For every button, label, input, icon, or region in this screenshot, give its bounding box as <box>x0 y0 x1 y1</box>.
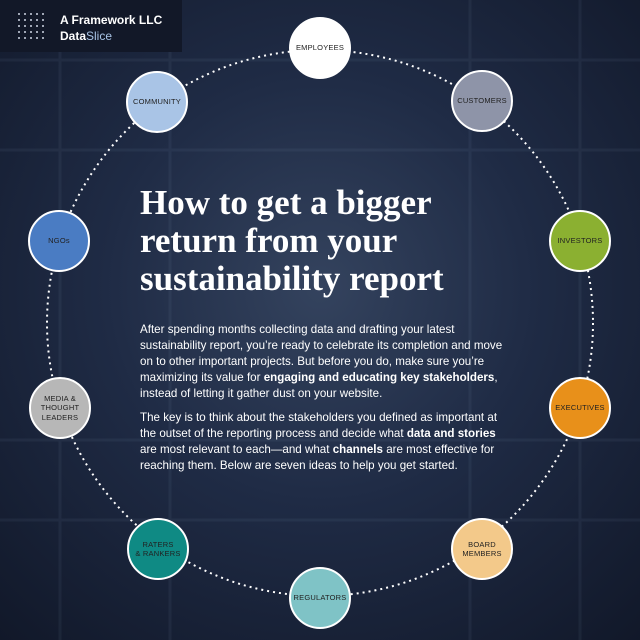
intro text: The key is to think about the stakeholders you defined as important at the outset of the reporting process and decide what data and stories are most relevant to each—and what channels are most effective for reaching them. Below are seven ideas to help you get started. <box>140 411 497 472</box>
intro text <box>140 323 502 472</box>
node: raters & rankers: & RANKERS <box>135 549 181 558</box>
node: media & thought leaders: MEDIA & <box>44 394 76 403</box>
title: How to get a bigger return from your sustainability report <box>140 183 444 298</box>
intro text: After spending months collecting data and drafting your latest sustainability report, you’re ready to celebrate its completion and move on to other important projects. But before you do, make sure you’re maximizing its value for engaging and educating key stakeholders, instead of letting it gather dust on your website. <box>140 323 502 400</box>
node: NGOs <box>28 210 90 272</box>
node: employees <box>289 17 351 79</box>
node: NGOs: NGOs <box>48 236 70 245</box>
node: community: COMMUNITY <box>133 97 181 106</box>
node: raters & rankers: RATERS <box>142 540 174 549</box>
brand text <box>60 13 162 43</box>
node: employees: EMPLOYEES <box>296 43 344 52</box>
node: media & thought leaders: LEADERS <box>42 413 78 422</box>
node: investors: INVESTORS <box>557 236 602 245</box>
node: regulators <box>289 567 351 629</box>
node: executives: EXECUTIVES <box>555 403 605 412</box>
brand text: DataSlice <box>60 29 112 43</box>
node: board members: MEMBERS <box>462 549 502 558</box>
node: community <box>126 71 188 133</box>
brand text: A Framework LLC <box>60 13 162 27</box>
node: customers: CUSTOMERS <box>457 96 507 105</box>
node: customers <box>451 70 513 132</box>
node: executives <box>549 377 611 439</box>
node: media & thought leaders: THOUGHT <box>41 403 79 412</box>
node: regulators: REGULATORS <box>294 593 346 602</box>
node: board members: BOARD <box>468 540 496 549</box>
node: raters & rankers <box>127 518 189 580</box>
logo header <box>0 0 182 52</box>
node: media & thought leaders <box>29 377 91 439</box>
icon: dot grid <box>18 13 44 39</box>
node: board members <box>451 518 513 580</box>
node: investors <box>549 210 611 272</box>
